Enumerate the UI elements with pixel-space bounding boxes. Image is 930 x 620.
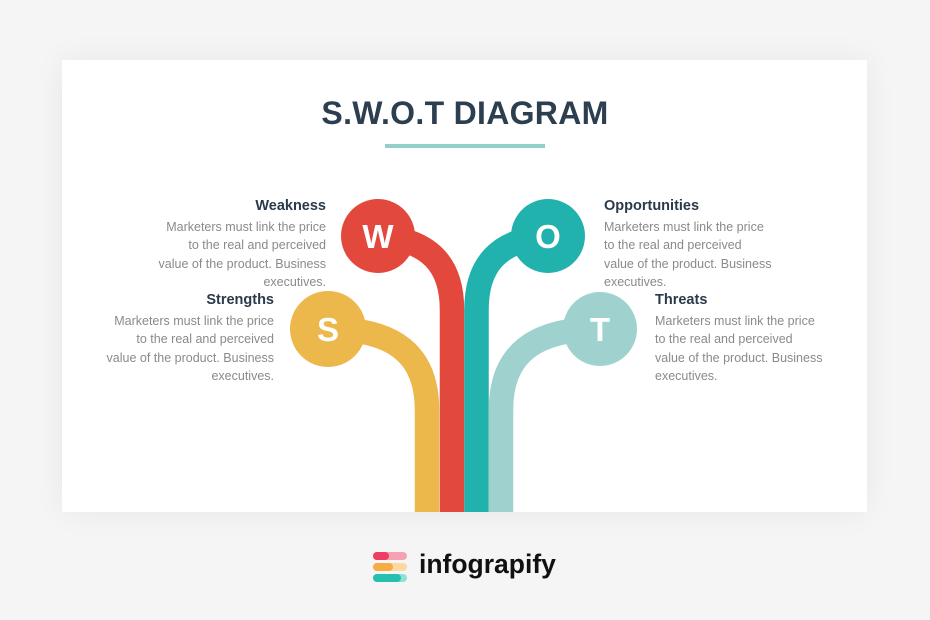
branch: threats: [501, 292, 637, 512]
strengths text: Marketers must link the price: [114, 314, 274, 328]
threats text: [655, 292, 822, 383]
strengths text: executives.: [211, 369, 274, 383]
logo text: infograpify: [419, 549, 556, 579]
opportunities text: executives.: [604, 275, 667, 289]
strengths text: Strengths: [206, 292, 274, 308]
strengths text: value of the product. Business: [107, 351, 274, 365]
logo: [373, 549, 556, 582]
opportunities text: value of the product. Business: [604, 257, 771, 271]
opportunities text: [604, 198, 771, 289]
logo icon: [373, 552, 407, 582]
weakness text: executives.: [263, 275, 326, 289]
threats text: Threats: [655, 292, 707, 308]
threats text: executives.: [655, 369, 718, 383]
threats text: value of the product. Business: [655, 351, 822, 365]
branch: strengths: S: [317, 311, 339, 348]
branch: strengths: [290, 291, 427, 512]
strengths text: [106, 292, 274, 383]
weakness text: to the real and perceived: [188, 238, 326, 252]
weakness text: value of the product. Business: [159, 257, 326, 271]
branch: threats: T: [590, 311, 610, 348]
title: S.W.O.T DIAGRAM: [321, 95, 609, 131]
title underline: [385, 144, 545, 148]
opportunities text: Opportunities: [604, 198, 699, 214]
threats text: to the real and perceived: [655, 332, 793, 346]
weakness text: Weakness: [255, 198, 326, 214]
opportunities text: to the real and perceived: [604, 238, 742, 252]
weakness text: Marketers must link the price: [166, 220, 326, 234]
branch: weakness: [341, 199, 452, 512]
threats text: Marketers must link the price: [655, 314, 815, 328]
card: [62, 60, 867, 512]
branch: weakness: W: [362, 218, 394, 255]
opportunities text: Marketers must link the price: [604, 220, 764, 234]
weakness text: [158, 198, 326, 289]
strengths text: to the real and perceived: [136, 332, 274, 346]
branch: opportunities: O: [535, 218, 561, 255]
branch: opportunities: [476, 199, 585, 512]
